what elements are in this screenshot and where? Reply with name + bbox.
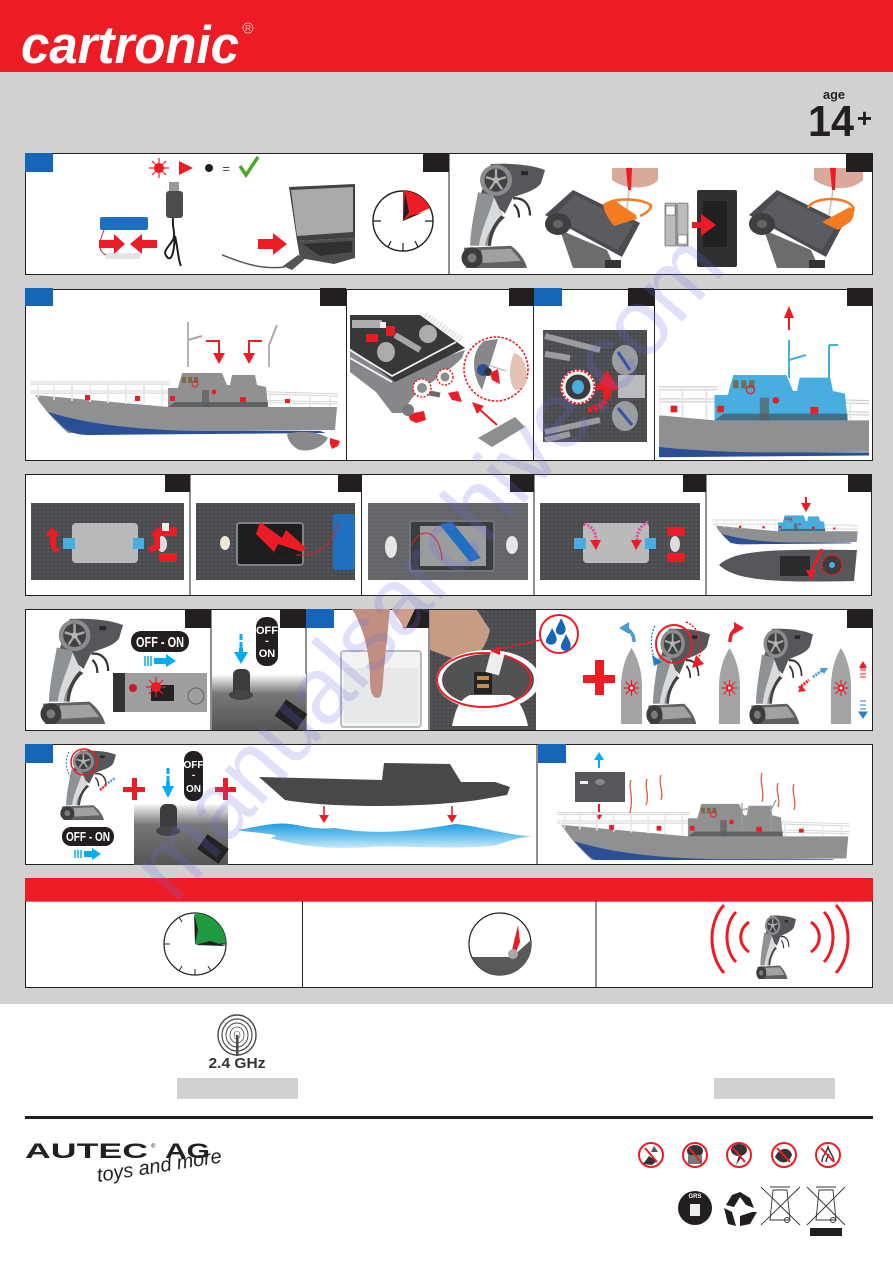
age badge: 14 xyxy=(808,97,854,146)
red arrow and photo: switch off xyxy=(575,752,625,820)
GRS badge xyxy=(678,1191,712,1225)
gauge: cooldown or depth xyxy=(469,913,531,975)
watermark: manualsarchive.com xyxy=(110,212,744,919)
photo: battery in xyxy=(368,503,528,580)
small boat and top view xyxy=(713,497,858,582)
age badge xyxy=(808,87,872,146)
AUTEC AG logo: ® xyxy=(151,1143,156,1150)
boat switch: OFF xyxy=(184,760,204,771)
opening battery cover xyxy=(545,168,658,268)
steering diagram xyxy=(619,622,744,724)
page background xyxy=(0,0,893,1004)
prohibition icons xyxy=(639,1143,840,1167)
header band xyxy=(0,0,893,75)
transmitter signal waves xyxy=(712,905,848,979)
step tabs xyxy=(25,288,873,306)
AUTEC AG logo: AG xyxy=(165,1140,210,1163)
grey info box left xyxy=(177,1078,298,1099)
clock: charging time xyxy=(373,191,433,251)
photo: battery out xyxy=(196,503,355,580)
boat silhouette xyxy=(259,763,510,806)
contact photo with droplet callout xyxy=(430,610,578,730)
switch pill: OFF - ON xyxy=(136,634,184,651)
recycling symbols xyxy=(678,1187,845,1236)
batteries into compartment xyxy=(665,190,737,267)
USB charger and battery xyxy=(99,182,183,266)
boat switch: - xyxy=(192,770,195,781)
step tabs xyxy=(185,609,429,628)
logo: cartronic: cartronic xyxy=(21,16,239,75)
boat switch panel xyxy=(212,617,307,731)
drying boat with heat xyxy=(557,773,849,863)
AUTEC AG logo xyxy=(25,1140,223,1187)
lifted superstructure xyxy=(531,306,893,458)
panel row 2: masts and hatch xyxy=(25,288,893,460)
LED legend: = xyxy=(222,161,230,176)
step tabs xyxy=(165,474,872,492)
boat switch xyxy=(134,751,229,865)
laptop xyxy=(222,184,355,270)
panel row 1: charging and batteries xyxy=(25,153,873,274)
deck photo xyxy=(543,330,647,442)
warning band with limits xyxy=(25,878,873,988)
boat with masts xyxy=(30,322,340,450)
LED legend xyxy=(149,157,258,178)
throttle diagram xyxy=(749,629,867,724)
clock: run time xyxy=(164,913,226,975)
arrows to water xyxy=(319,806,457,823)
recycle mark xyxy=(724,1192,757,1226)
step tabs xyxy=(25,153,873,172)
plus signs xyxy=(123,778,236,800)
panel row 3: battery hatch steps xyxy=(26,474,872,596)
propeller detail xyxy=(350,315,528,447)
closing battery cover xyxy=(749,153,873,268)
grey info box right xyxy=(714,1078,835,1099)
GRS badge: GRS xyxy=(688,1194,702,1200)
switch pill xyxy=(131,631,189,652)
transmitter with switch: OFF - ON xyxy=(66,829,110,844)
age badge: age xyxy=(823,87,845,102)
boat switch: ON xyxy=(186,784,201,795)
boat switch panel: OFF xyxy=(256,625,278,637)
transmitter xyxy=(462,164,545,269)
water waves xyxy=(238,823,532,848)
red plus xyxy=(583,660,615,695)
2.4 GHz radio icon: 2.4 GHz xyxy=(208,1056,266,1072)
glass of water with finger xyxy=(341,609,421,727)
logo: cartronic: R xyxy=(245,24,251,33)
boat switch panel: ON xyxy=(259,648,275,660)
AUTEC AG logo: AUTEC xyxy=(25,1140,148,1163)
panel row 5: launch and retrieve xyxy=(25,744,872,865)
crossed bin with bar xyxy=(807,1187,845,1236)
panel row 4: power on and steering xyxy=(26,609,873,731)
boat switch panel: - xyxy=(265,635,269,647)
crossed bin xyxy=(761,1187,800,1225)
step tabs xyxy=(25,744,566,763)
transmitter with switch xyxy=(40,619,207,725)
transmitter with switch xyxy=(60,749,116,860)
photo: unlock hatch xyxy=(31,503,184,580)
photo: lock hatch xyxy=(540,503,700,580)
age badge: + xyxy=(857,103,872,133)
2.4 GHz radio icon xyxy=(208,1015,266,1072)
AUTEC AG logo: toys and more xyxy=(95,1145,223,1187)
